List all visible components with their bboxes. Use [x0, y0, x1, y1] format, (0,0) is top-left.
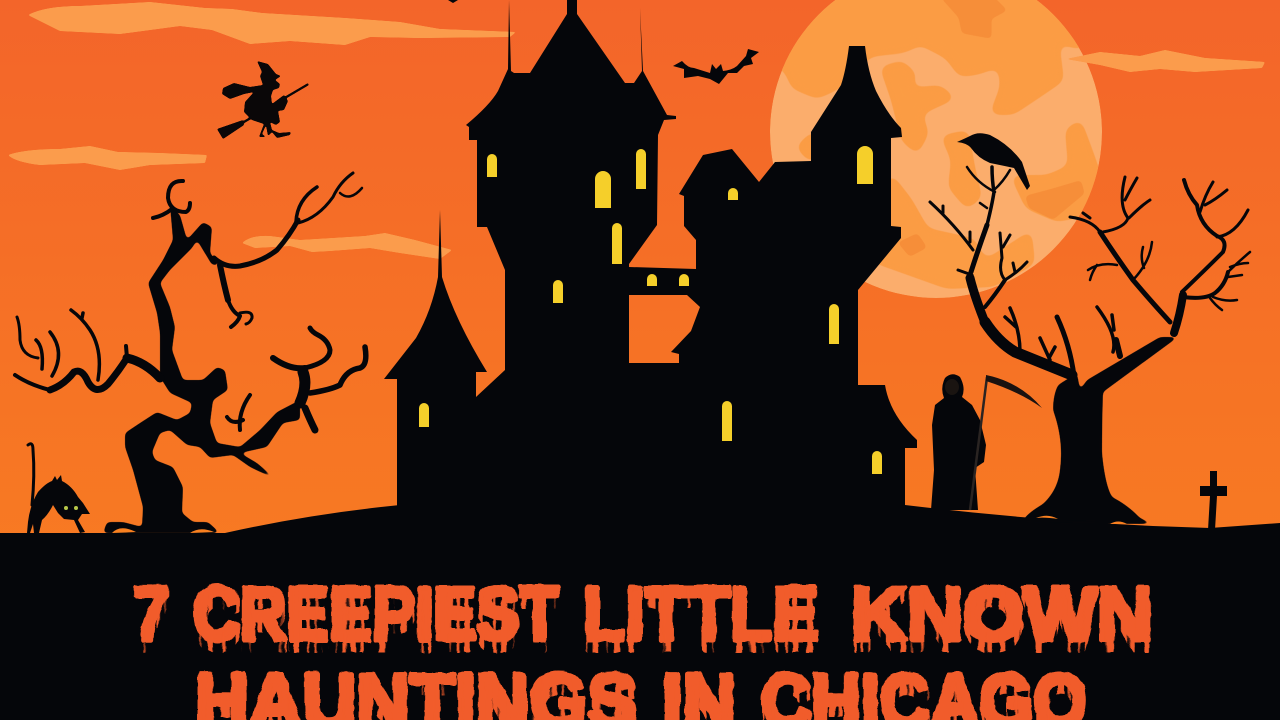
full moon [760, 0, 1110, 298]
lit windows [419, 146, 882, 474]
root gaps right [1036, 516, 1127, 524]
title line 1 [133, 572, 1153, 657]
root gaps [112, 528, 214, 533]
title line 2 [195, 659, 1087, 720]
crow [957, 133, 1030, 190]
cat eyes [64, 506, 78, 510]
ground hill [0, 505, 1280, 720]
black cat [27, 444, 90, 533]
haunted castle [384, 0, 917, 520]
cloud over moon [1066, 50, 1265, 72]
bat [673, 49, 759, 84]
title line 1: LITTLE [583, 572, 819, 657]
grim reaper with scythe [931, 374, 1042, 510]
small bat fragment at top edge [448, 0, 458, 3]
grave cross [1200, 471, 1227, 530]
scythe pole and blade [970, 375, 1042, 510]
flying witch on broom [217, 61, 309, 139]
title line 1: KNOWN [851, 572, 1153, 657]
bare tree with crow [930, 133, 1250, 524]
title [133, 572, 1153, 720]
left twisted tree [15, 173, 366, 533]
title line 1: CREEPIEST [193, 572, 559, 657]
hood face [945, 379, 959, 395]
title line 1: 7 [133, 572, 169, 657]
clouds [8, 2, 516, 259]
